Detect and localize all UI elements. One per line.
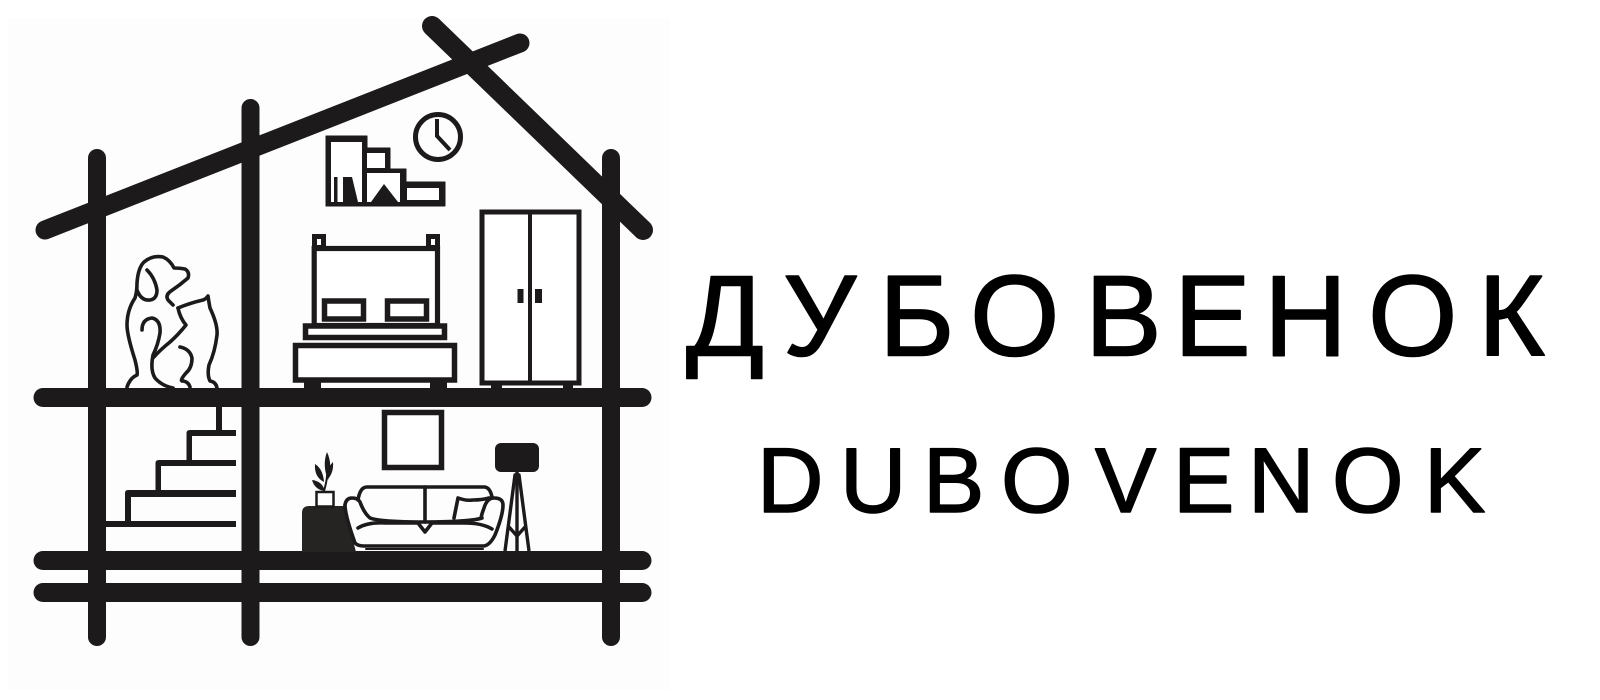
icon: sofa xyxy=(345,487,503,549)
headboard posts xyxy=(314,236,438,248)
icon: dog and cat xyxy=(127,257,217,388)
house frame: beams xyxy=(43,26,643,637)
icon: wall clock xyxy=(416,114,460,160)
subtitle: Latin wordmark: DUBOVENOK xyxy=(757,430,1485,532)
icon: wall shelf with books xyxy=(326,136,445,206)
icon: side table xyxy=(302,506,356,552)
icon: floor lamp xyxy=(495,443,539,551)
icon: wardrobe xyxy=(482,212,579,389)
icon: potted plant xyxy=(312,452,334,506)
title: Cyrillic wordmark: ДУБОВЕНОК xyxy=(686,252,1545,380)
icon: staircase xyxy=(104,405,236,527)
icon: bed xyxy=(296,236,454,389)
icon: framed picture xyxy=(384,412,442,468)
